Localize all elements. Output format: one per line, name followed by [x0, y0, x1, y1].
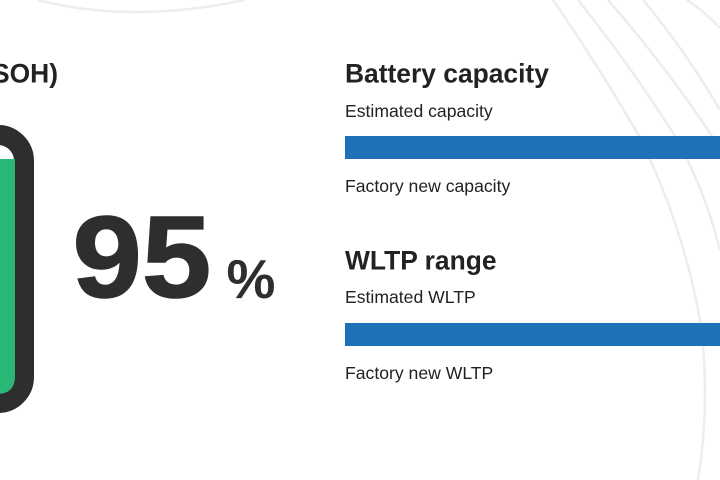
label: estimated WLTP: Estimated WLTP: [345, 287, 476, 307]
panel: WLTP range: [345, 246, 720, 383]
label: factory new WLTP: Factory new WLTP: [345, 363, 493, 383]
icon: battery: [0, 135, 24, 403]
bar: WLTP: [345, 323, 720, 346]
heading: battery capacity: Battery capacity: [345, 58, 549, 88]
state of health percentage: [72, 192, 275, 322]
state of health percentage: %: [226, 248, 275, 310]
label: factory new capacity: Factory new capacity: [345, 176, 510, 196]
bar: capacity: [345, 136, 720, 159]
panel: battery capacity: [345, 58, 720, 196]
heading: WLTP range: WLTP range: [345, 246, 497, 276]
state of health percentage: 95: [72, 192, 211, 322]
label: estimated capacity: Estimated capacity: [345, 101, 493, 121]
